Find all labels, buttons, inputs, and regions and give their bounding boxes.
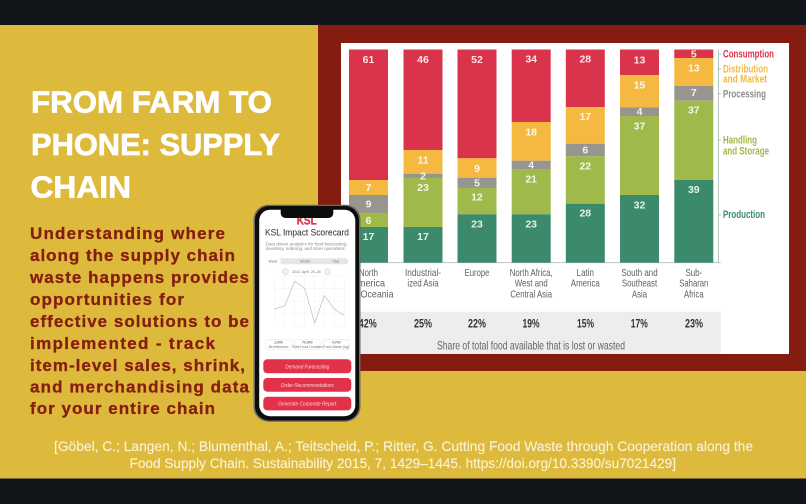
bar: Industrialized Asia [404,50,442,263]
title: CHAIN [30,170,131,204]
bar: North America and Oceania: 9 [366,198,372,210]
body text: waste happens provides [29,268,249,287]
body text: opportunities for [30,290,184,309]
button: generate corporate report [263,397,351,410]
button: order recommendations: Order Recommendations [281,383,334,389]
region labels: Asia [632,288,647,300]
body text: and merchandising data [30,378,250,396]
region labels: Sub- [685,267,703,279]
legend axis line [718,50,721,263]
legend: Distribution [723,64,768,76]
body text [29,224,250,418]
title: FROM FARM TO [31,84,272,120]
period tabs: Year [332,259,340,263]
region labels: Industrial- [405,267,441,279]
bar: Europe: 5 [474,178,480,190]
line chart [274,276,344,326]
button: demand forecasting [263,359,351,373]
bar: North Africa, West and Central Asia: 23 [525,218,537,230]
bar: North America and Oceania: 61 [363,54,374,66]
legend [723,48,774,221]
stat cards: Food Waste (kg) [323,345,349,349]
citation: [Göbel, C.; Langen, N.; Blumenthal, A.; Teitscheid, P.; Ritter, G. Cutting Food Waste through Cooperation along the [54,438,753,454]
citation [54,438,753,471]
button: demand forecasting: Demand Forecasting [285,364,330,370]
bar: South and Southeast Asia: 15 [634,80,645,92]
body text: for your entire chain [30,399,215,418]
bar: South and Southeast Asia: 13 [634,54,645,66]
phone mockup [254,205,360,422]
stat cards: 70,000 [302,340,313,344]
stat cards [266,339,349,349]
period tabs: Month [300,259,310,263]
stat cards: 4,700 [332,340,341,344]
region labels: North Africa, [510,267,553,279]
app subtitle [266,241,347,251]
percentage row: 22% [468,316,486,330]
bar: Industrialized Asia: 2 [420,170,426,182]
bar: North America and Oceania [349,50,388,263]
bar: North Africa, West and Central Asia: 4 [528,160,534,172]
bar: Industrialized Asia: 17 [417,231,429,243]
region labels: Europe [465,267,489,279]
app title: KSL Impact Scorecard [265,227,349,238]
percentage row: 17% [631,316,648,330]
bar: Europe: 9 [474,163,480,175]
title [30,84,280,204]
button: order recommendations [263,378,351,392]
bar: Sub-Saharan Africa: 39 [688,184,700,196]
bar: Latin America: 28 [579,208,591,220]
bar: Sub-Saharan Africa: 7 [691,87,697,99]
bar: Sub-Saharan Africa: 37 [688,104,700,116]
bar: North Africa, West and Central Asia: 21 [525,174,537,186]
legend: Consumption [723,48,774,60]
period tabs: Week [269,259,278,263]
bar: Industrialized Asia: 11 [417,154,429,166]
bar: Sub-Saharan Africa [674,48,713,263]
legend: Processing [723,88,766,100]
bar: North America and Oceania: 6 [366,215,372,227]
bar: South and Southeast Asia: 37 [634,120,645,132]
bar: North America and Oceania: 17 [363,231,374,243]
region labels: Latin [577,267,594,279]
region labels: Saharan [679,278,708,290]
phone screen [259,210,355,416]
body text: item-level sales, shrink, [30,356,245,375]
bar: Sub-Saharan Africa: 13 [688,62,700,74]
region labels: ized Asia [407,278,439,290]
bar: Latin America: 6 [582,144,588,156]
app subtitle: inventory, ordering, and store operations. [266,246,346,251]
citation: Food Supply Chain. Sustainability 2015, 7, 1429–1445. https://doi.org/10.3390/su7021429] [130,455,676,471]
region labels: America [352,278,385,290]
stat cards: Total Food Donated [292,345,323,349]
percentage row: 19% [522,316,540,330]
legend: Production [723,209,765,221]
bar: South and Southeast Asia: 4 [637,106,643,118]
bar: Europe: 52 [471,54,483,66]
bottom black band [0,478,806,504]
stat cards: 1,000 [274,340,283,344]
bar: Europe: 23 [471,218,483,230]
bar: Latin America: 17 [579,111,591,123]
region labels: South and [621,267,658,279]
region labels [344,267,708,300]
phone body [254,205,360,422]
bar: North Africa, West and Central Asia: 34 [525,54,537,66]
bar: Sub-Saharan Africa: 5 [691,48,697,60]
period tabs [265,258,348,264]
bar: North Africa, West and Central Asia: 18 [525,126,537,138]
body text: implemented - track [30,334,216,353]
bar: South and Southeast Asia: 32 [634,200,645,212]
panel: stacked bar chart [341,43,789,354]
app subtitle: Data driven analytics for food forecasting, [266,241,347,246]
legend: Handling [723,135,757,147]
percentage row: 25% [414,316,432,330]
bar: North America and Oceania: 7 [366,182,372,194]
title: PHONE: SUPPLY [31,127,280,162]
bar: Latin America [566,50,605,263]
body text: Understanding where [30,224,225,243]
bar: South and Southeast Asia [620,50,659,263]
bar: Europe [458,50,496,263]
region labels: America [571,278,600,290]
region labels: and Oceania [344,288,394,300]
percentage row [359,316,703,330]
percentage row: 42% [359,316,377,330]
body text: effective solutions to be [30,312,249,331]
app logo: KSL [297,214,317,228]
phone notch [281,209,333,218]
chart caption: Share of total food available that is lost or wasted [437,339,625,353]
bar: Industrialized Asia: 23 [417,182,429,194]
button: generate corporate report: Generate Corporate Report [278,402,337,408]
date selector: 2022, April, 20–26 [292,270,321,274]
region labels: Southeast [622,278,657,290]
legend: and Market [723,74,767,86]
dark red chart backdrop [318,25,806,371]
legend: and Storage [723,145,769,157]
region labels: North [359,267,378,279]
region labels: West and [515,278,548,290]
top black band [0,0,806,25]
bar: Latin America: 28 [579,54,591,66]
bar: Latin America: 22 [579,160,591,172]
region labels: Central Asia [510,288,552,300]
percentage row: 15% [577,316,594,330]
bar: Europe: 12 [471,192,483,204]
stat cards: Beneficiaries [268,345,289,349]
body text: along the supply chain [30,246,235,265]
date selector [282,269,331,275]
bar: North Africa, West and Central Asia [512,50,551,263]
region labels: Africa [684,288,704,300]
bar: Industrialized Asia: 46 [417,54,429,66]
percentage row: 23% [685,316,703,330]
